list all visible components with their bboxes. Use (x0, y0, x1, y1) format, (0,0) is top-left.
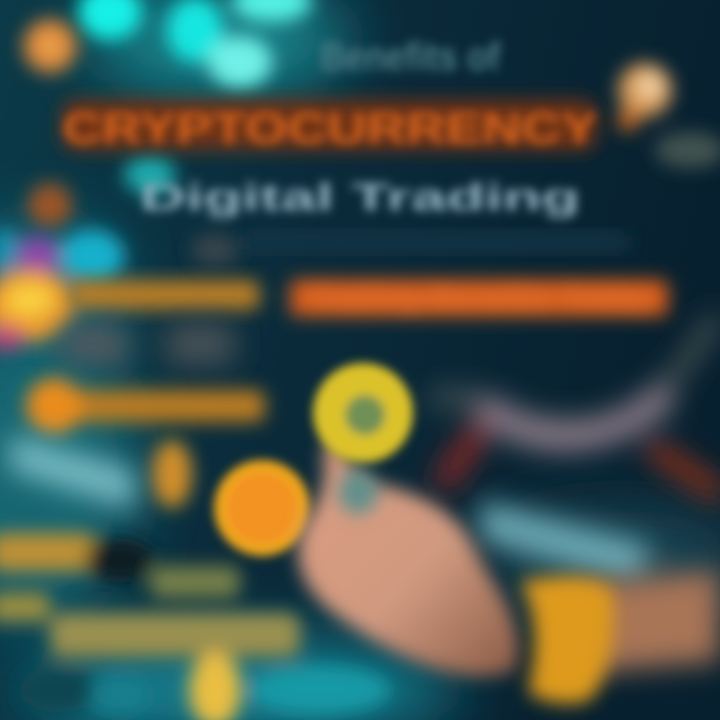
labels: lower left gold (0, 533, 390, 720)
heading: line one: Benefits of (320, 35, 501, 79)
icon: cyan hexagons at top (78, 0, 312, 195)
label: orange coin with bar (26, 378, 265, 434)
line chart (435, 320, 715, 490)
icon: small gold drop (152, 440, 192, 508)
heading: pale line: Digital Trading (140, 177, 580, 219)
hand holding coin (298, 440, 720, 704)
icon: orange coin centre (214, 460, 310, 556)
title (62, 35, 598, 219)
orange banner: Trading Benefits Today (309, 285, 650, 310)
icon: yellow ring coin (313, 363, 413, 463)
icon: small teal coin in fingers (338, 470, 378, 514)
hand (298, 440, 519, 676)
pale diagonal bands (10, 435, 650, 585)
icon: bracelet (520, 577, 614, 704)
label: gold bar upper left (70, 280, 260, 310)
heading: orange line: CRYPTOCURRENCY (62, 104, 598, 153)
orange banner (290, 280, 668, 316)
icon: orange coin top right (617, 63, 720, 168)
grey text blocks (60, 322, 235, 366)
arm (560, 570, 720, 674)
icon: colourful cluster left (0, 228, 239, 350)
icon: orange coin top left (23, 19, 77, 73)
faint subtitle (240, 234, 630, 250)
icon: small orange coin (28, 183, 72, 227)
